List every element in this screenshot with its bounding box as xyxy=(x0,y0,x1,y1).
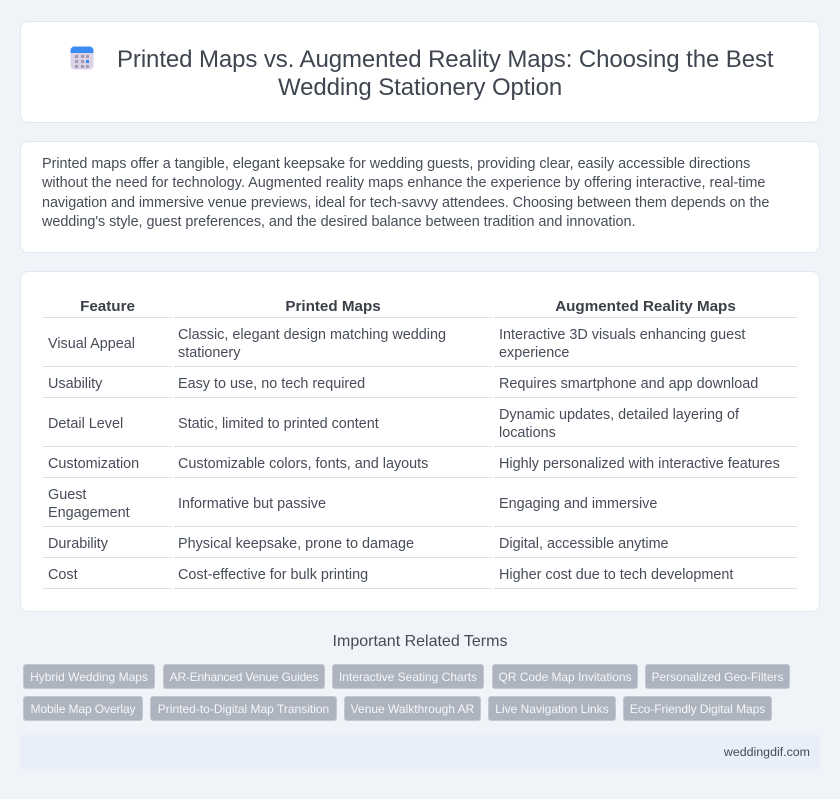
title: Wedding Stationery Option xyxy=(278,74,562,101)
row: detail level: Dynamic updates, detailed layering of xyxy=(499,407,739,423)
intro text: wedding's style, guest preferences, and the desired balance between tradition and innovation. xyxy=(42,214,635,230)
row: guest engagement: Informative but passive xyxy=(178,496,326,512)
related term tags: Venue Walkthrough AR xyxy=(351,702,474,716)
row: usability: Easy to use, no tech required xyxy=(178,376,365,392)
row: detail level: locations xyxy=(499,425,556,441)
header card xyxy=(20,21,820,123)
comparison table panel xyxy=(20,271,820,612)
intro panel xyxy=(20,141,820,253)
row: cost: Higher cost due to tech development xyxy=(499,567,733,583)
related term tags: Personalized Geo-Filters xyxy=(651,670,784,684)
related term tags: Interactive Seating Charts xyxy=(339,670,477,684)
row: visual appeal: Interactive 3D visuals enhancing guest xyxy=(499,327,745,343)
row: customization xyxy=(48,456,780,472)
related term tags: AR-Enhanced Venue Guides xyxy=(170,670,318,684)
row: cost: Cost xyxy=(48,567,78,583)
column headers xyxy=(80,298,736,315)
row: durability: Physical keepsake, prone to damage xyxy=(178,536,414,552)
intro text: navigation and immersive venue previews, ideal for tech-savvy attendees. Choosing between them depends on the xyxy=(42,195,769,211)
row: detail level xyxy=(48,407,740,441)
row: durability: Durability xyxy=(48,536,108,552)
related terms heading: Important Related Terms xyxy=(333,633,507,650)
related term tags: Printed-to-Digital Map Transition xyxy=(158,702,329,716)
intro text: Printed maps offer a tangible, elegant keepsake for wedding guests, providing clear, easily accessible directions xyxy=(42,156,750,172)
row: visual appeal xyxy=(48,327,746,361)
title: Printed Maps vs. Augmented Reality Maps: Choosing the Best xyxy=(117,46,773,73)
footer bar xyxy=(20,735,820,769)
row: customization: Customizable colors, fonts, and layouts xyxy=(178,456,428,472)
related term tags: Mobile Map Overlay xyxy=(31,702,135,716)
row: customization: Customization xyxy=(48,456,139,472)
row: cost: Cost-effective for bulk printing xyxy=(178,567,368,583)
footer source text: weddingdif.com xyxy=(724,745,810,759)
title xyxy=(117,46,774,101)
intro text xyxy=(42,156,769,230)
row: visual appeal: stationery xyxy=(178,345,240,361)
row: visual appeal: Classic, elegant design matching wedding xyxy=(178,327,446,343)
row: usability: Usability xyxy=(48,376,102,392)
row: guest engagement: Engagement xyxy=(48,505,130,521)
intro text: without the need for technology. Augmented reality maps enhance the experience by offering interactive, real-time xyxy=(42,175,765,191)
row: guest engagement: Guest xyxy=(48,487,86,503)
icon: calendar xyxy=(70,46,94,70)
related term tags xyxy=(23,664,790,721)
row: visual appeal: Visual Appeal xyxy=(48,336,135,352)
column headers: Augmented Reality Maps xyxy=(555,298,736,315)
row: guest engagement xyxy=(48,487,657,521)
column headers: Printed Maps xyxy=(285,298,381,315)
row: visual appeal: experience xyxy=(499,345,569,361)
related term tags: Eco-Friendly Digital Maps xyxy=(630,702,765,716)
row: cost xyxy=(48,567,734,583)
row: customization: Highly personalized with interactive features xyxy=(499,456,780,472)
related term tags: QR Code Map Invitations xyxy=(499,670,631,684)
row: detail level: Detail Level xyxy=(48,416,123,432)
related term tags: Hybrid Wedding Maps xyxy=(30,670,148,684)
row: durability xyxy=(48,536,669,552)
row: usability xyxy=(48,376,758,392)
row: usability: Requires smartphone and app download xyxy=(499,376,758,392)
row: detail level: Static, limited to printed content xyxy=(178,416,379,432)
row: guest engagement: Engaging and immersive xyxy=(499,496,657,512)
row: durability: Digital, accessible anytime xyxy=(499,536,669,552)
related term tags: Live Navigation Links xyxy=(495,702,609,716)
column headers: Feature xyxy=(80,298,135,315)
